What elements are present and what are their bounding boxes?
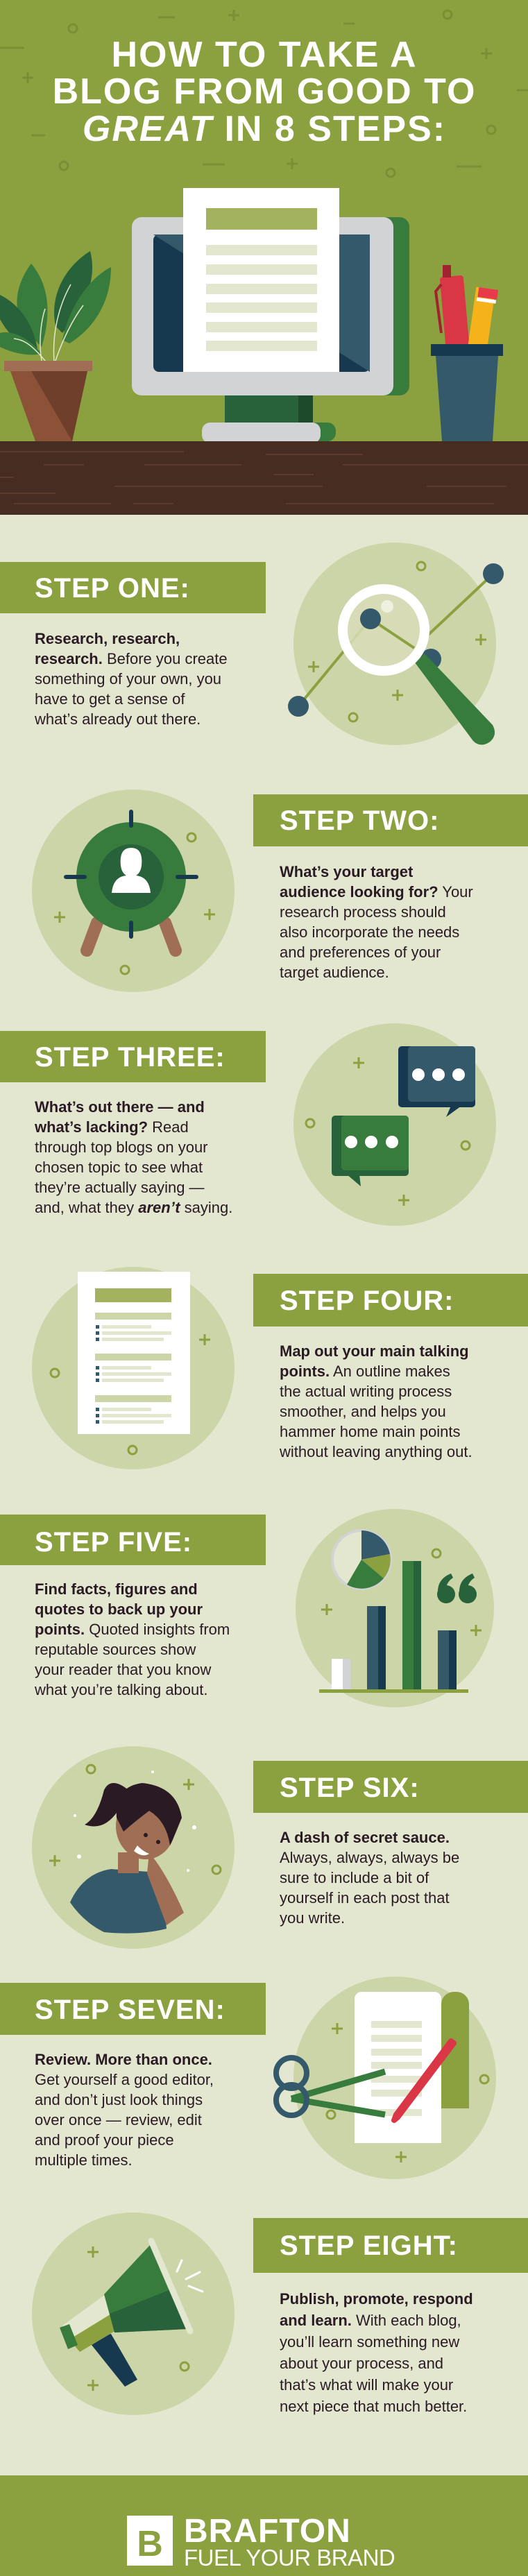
step one text: have to get a sense of xyxy=(35,690,185,708)
step seven text: Get yourself a good editor, xyxy=(35,2071,214,2088)
step six banner: STEP SIX: xyxy=(280,1773,420,1803)
step eight text: and learn. With each blog, xyxy=(280,2312,461,2329)
icon: document, scissors and pen xyxy=(276,1977,496,2179)
step seven text: multiple times. xyxy=(35,2151,133,2169)
step seven banner: STEP SEVEN: xyxy=(35,1995,225,2025)
step two text: also incorporate the needs xyxy=(280,923,459,941)
step two text: research process should xyxy=(280,903,446,921)
step five text xyxy=(34,1580,230,1698)
step six text: sure to include a bit of xyxy=(280,1869,429,1886)
step two text: target audience. xyxy=(280,964,389,981)
logo text xyxy=(184,2513,395,2570)
step one text: something of your own, you xyxy=(35,670,221,688)
step six text: A dash of secret sauce. xyxy=(280,1829,450,1846)
logo: Brafton B mark: B xyxy=(137,2524,163,2564)
step three banner: STEP THREE: xyxy=(35,1042,225,1073)
step one text: what’s already out there. xyxy=(34,710,201,728)
step two banner xyxy=(253,794,528,846)
icon: computer monitor with document xyxy=(132,188,409,443)
step seven banner xyxy=(0,1983,266,2035)
step four text: Map out your main talking xyxy=(280,1342,469,1360)
step five text: your reader that you know xyxy=(35,1661,211,1678)
title: BLOG FROM GOOD TO xyxy=(53,71,476,112)
title xyxy=(53,35,476,149)
step three text xyxy=(34,1098,232,1216)
step four text xyxy=(279,1342,472,1460)
step three banner xyxy=(0,1031,266,1082)
step two text: audience looking for? Your xyxy=(280,883,473,901)
step seven text: Review. More than once. xyxy=(35,2051,212,2068)
step two text: What’s your target xyxy=(280,863,414,880)
icon: outline document xyxy=(32,1267,235,1469)
step six text: you write. xyxy=(280,1909,345,1927)
step eight text: next piece that much better. xyxy=(280,2398,467,2415)
step five banner: STEP FIVE: xyxy=(35,1527,192,1558)
step one banner: STEP ONE: xyxy=(35,573,190,604)
step eight text: that’s what will make your xyxy=(280,2376,453,2394)
step four text: without leaving anything out. xyxy=(279,1443,472,1460)
icon: audience target xyxy=(32,790,235,992)
step five panel xyxy=(0,1509,494,1707)
step four text: smoother, and helps you xyxy=(280,1403,446,1420)
step four banner xyxy=(253,1274,528,1327)
icon: magnifying glass over chart xyxy=(288,543,504,745)
icon: bar chart with pie and quote xyxy=(296,1509,494,1707)
step five text: what you’re talking about. xyxy=(34,1681,208,1698)
step one panel xyxy=(0,543,504,745)
step seven text xyxy=(35,2051,214,2169)
step six banner xyxy=(253,1761,528,1813)
step four text: points. An outline makes xyxy=(280,1363,450,1380)
step eight panel xyxy=(32,2212,528,2415)
step six text: Always, always, always be xyxy=(280,1849,459,1866)
step five text: points. Quoted insights from xyxy=(35,1621,230,1638)
step five banner xyxy=(0,1515,266,1565)
step five text: quotes to back up your xyxy=(35,1601,203,1618)
step eight text: you’ll learn something new xyxy=(280,2333,459,2351)
step three panel xyxy=(0,1023,496,1226)
step seven text: over once — review, edit xyxy=(35,2111,202,2129)
step eight banner: STEP EIGHT: xyxy=(280,2230,458,2261)
step two banner: STEP TWO: xyxy=(280,805,439,836)
icon: pen cup xyxy=(431,265,503,441)
step four text: the actual writing process xyxy=(280,1383,452,1400)
step six text: yourself in each post that xyxy=(280,1889,450,1907)
step eight text: Publish, promote, respond xyxy=(280,2290,473,2308)
step two panel xyxy=(32,790,528,992)
step three text: what’s lacking? Read xyxy=(34,1118,189,1136)
title: GREAT IN 8 STEPS: xyxy=(83,109,446,149)
footer xyxy=(0,2475,528,2576)
step four text: hammer home main points xyxy=(280,1423,460,1440)
icon: megaphone xyxy=(32,2212,235,2415)
step seven text: and don’t just look things xyxy=(35,2091,203,2108)
step three text: What’s out there — and xyxy=(35,1098,205,1116)
step seven text: and proof your piece xyxy=(35,2131,174,2149)
step eight text: about your process, and xyxy=(280,2355,443,2372)
step six panel xyxy=(32,1746,528,1949)
step four panel xyxy=(32,1267,528,1469)
title: HOW TO TAKE A xyxy=(111,35,418,75)
step one text xyxy=(34,630,228,728)
step one text: Research, research, xyxy=(35,630,180,647)
logo text: FUEL YOUR BRAND xyxy=(184,2545,395,2570)
header panel xyxy=(0,0,528,441)
step eight banner xyxy=(253,2218,528,2273)
logo: Brafton B mark xyxy=(127,2516,173,2566)
icon: smiling woman xyxy=(32,1746,235,1949)
step three text: and, what they aren’t saying. xyxy=(35,1199,232,1216)
logo text: BRAFTON xyxy=(184,2513,351,2550)
step five text: reputable sources show xyxy=(35,1641,196,1658)
step three text: through top blogs on your xyxy=(35,1138,208,1156)
step seven panel xyxy=(0,1977,496,2179)
desk xyxy=(0,441,528,515)
step three text: they’re actually saying — xyxy=(35,1179,205,1196)
step four banner: STEP FOUR: xyxy=(280,1286,454,1316)
step six text xyxy=(280,1829,459,1927)
step three text: chosen topic to see what xyxy=(35,1159,203,1176)
icon: speech bubbles xyxy=(293,1023,496,1226)
step eight text xyxy=(280,2290,473,2415)
step two text xyxy=(280,863,473,981)
step one text: research. Before you create xyxy=(35,650,228,667)
step five text: Find facts, figures and xyxy=(35,1580,198,1598)
step two text: and preferences of your xyxy=(280,944,441,961)
icon: potted plant xyxy=(0,251,111,441)
step one banner xyxy=(0,562,266,613)
